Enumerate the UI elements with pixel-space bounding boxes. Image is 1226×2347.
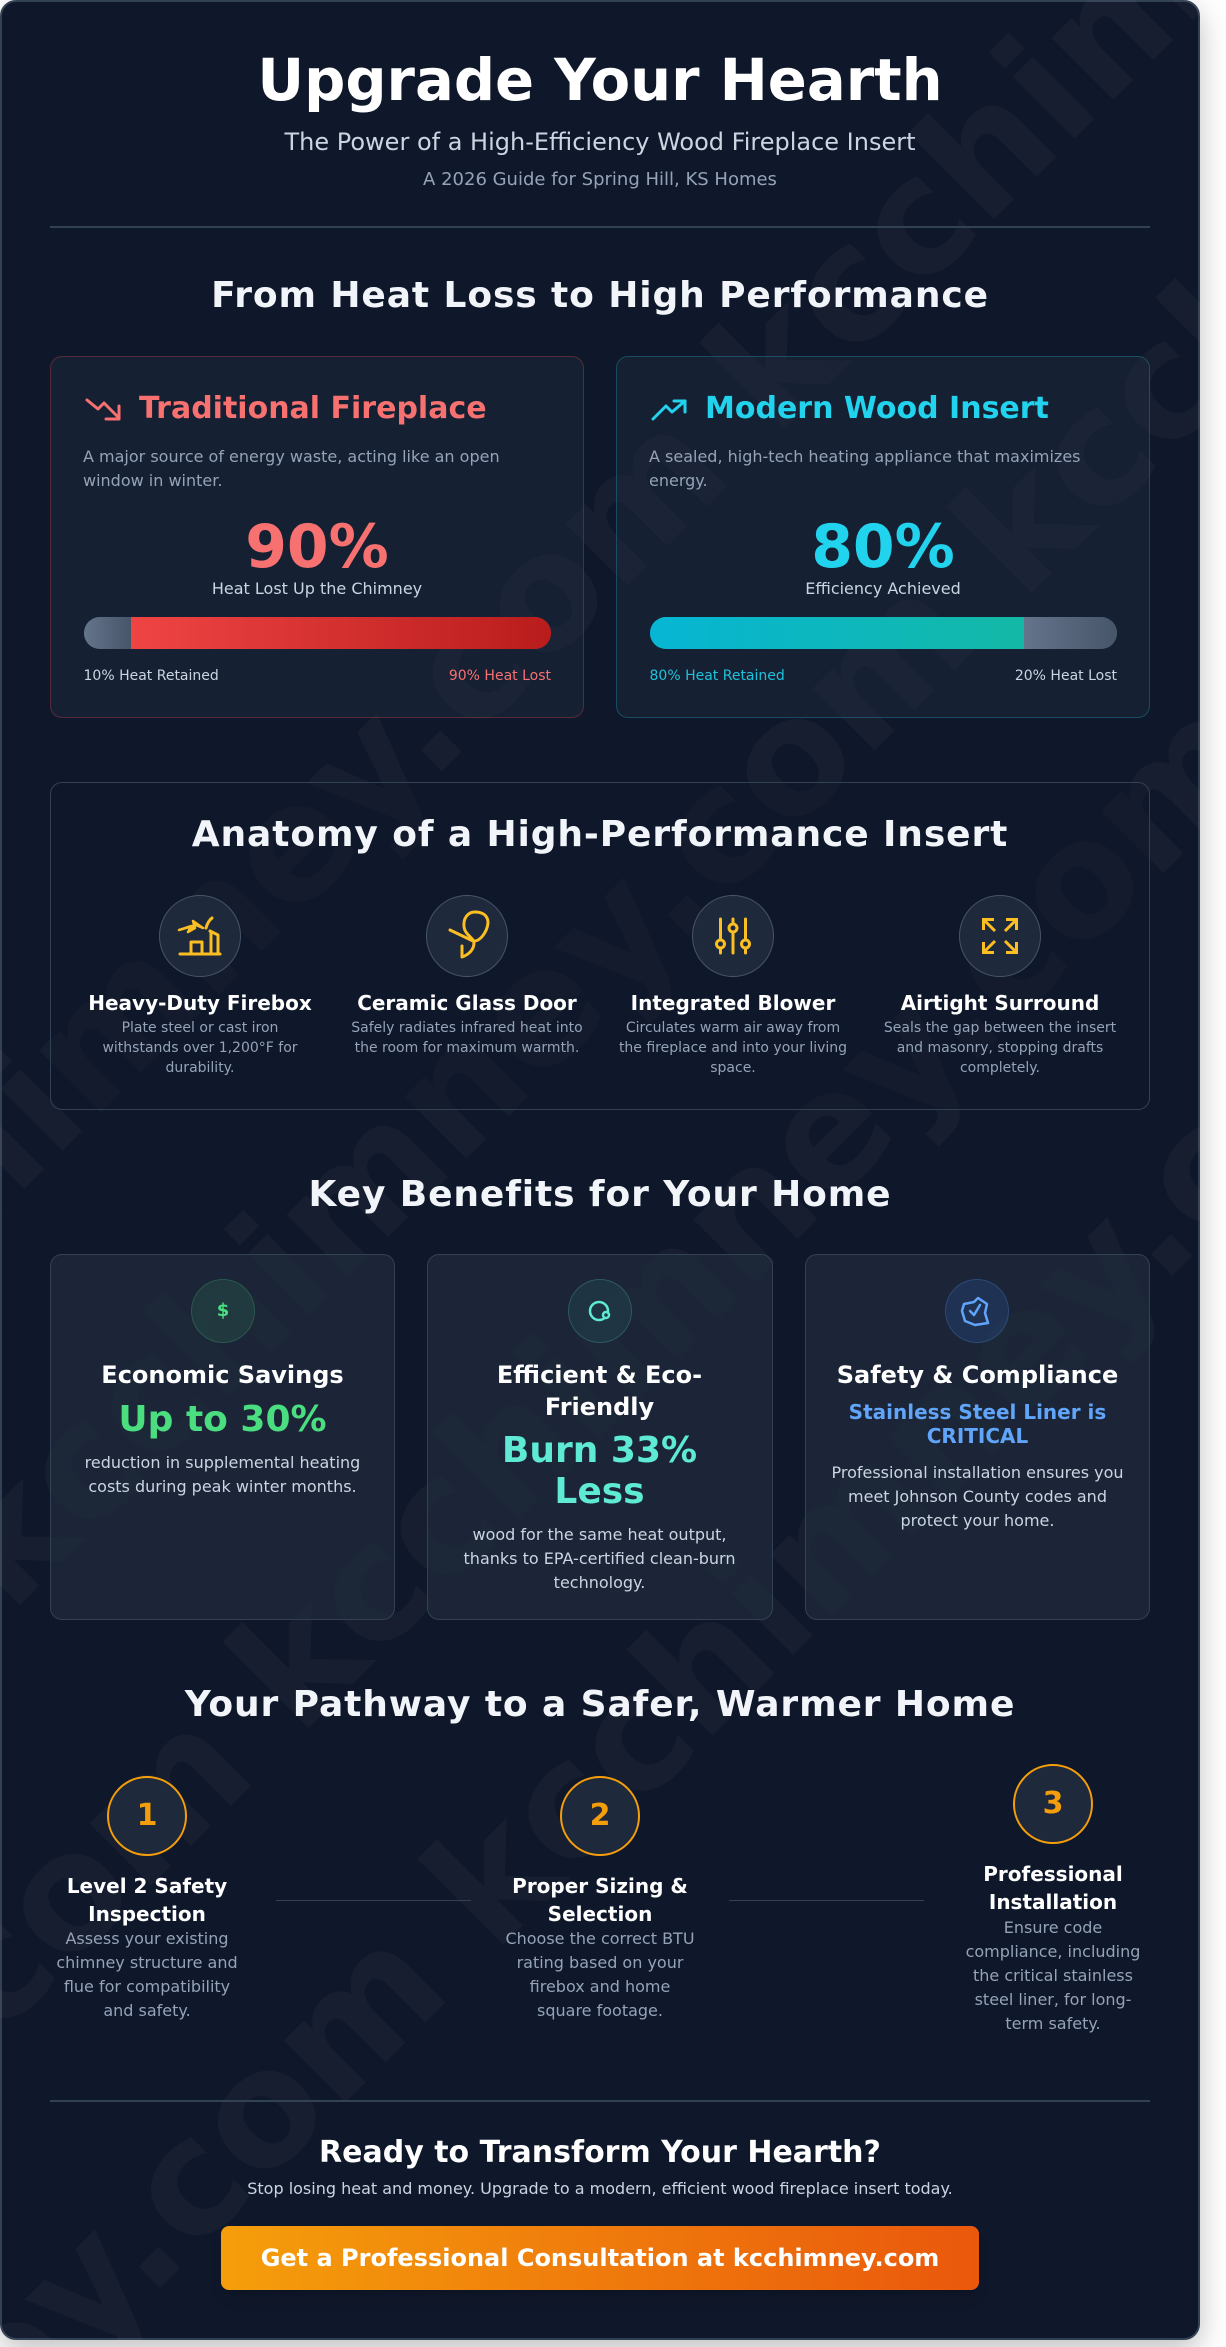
step 1 title: Inspection (88, 1902, 206, 1926)
card stat (849, 1400, 1106, 1448)
card: economic savings (50, 1254, 395, 1620)
card: eco-friendly (427, 1254, 773, 1620)
feature title: Airtight Surround (901, 991, 1099, 1015)
step 2 title: Proper Sizing & (512, 1874, 688, 1898)
card description: thanks to EPA-certified clean-burn (464, 1549, 735, 1568)
feature description: Safely radiates infrared heat into (351, 1020, 583, 1036)
stat: 80%: 80% (811, 512, 955, 582)
title: Upgrade Your Hearth (257, 47, 943, 114)
card stat: CRITICAL (927, 1424, 1028, 1448)
step 3 number: 3 (1043, 1786, 1063, 1821)
heading: pathway: Your Pathway to a Safer, Warmer Home (185, 1684, 1015, 1725)
stat: 90%: 90% (245, 512, 389, 582)
card description: technology. (554, 1573, 645, 1592)
panel: anatomy (50, 782, 1150, 1110)
card title: Efficient & Eco- (497, 1361, 702, 1389)
step 1 description: flue for compatibility (64, 1977, 230, 1996)
step 2 description: rating based on your (517, 1953, 683, 1972)
icon: airtight expand arrows (959, 895, 1041, 977)
icon: trending up (651, 399, 687, 421)
panel title: Traditional Fireplace (139, 391, 487, 426)
step 1 title: Level 2 Safety (67, 1874, 227, 1898)
card title: Safety & Compliance (837, 1361, 1118, 1389)
card description (831, 1463, 1124, 1530)
step 1 title (67, 1874, 227, 1926)
card description: costs during peak winter months. (88, 1477, 357, 1496)
call to action button: Get a Professional Consultation at kcchimney.com (261, 2244, 939, 2272)
feature description (102, 1020, 298, 1076)
step 2 description: Choose the correct BTU (505, 1929, 695, 1948)
step 1 number (107, 1776, 187, 1856)
card description: Professional installation ensures you (831, 1463, 1124, 1482)
heading: heat loss to performance: From Heat Loss to High Performance (211, 275, 989, 316)
step 2 description: firebox and home (530, 1977, 670, 1996)
feature description: space. (710, 1060, 756, 1076)
step 1 description: Assess your existing (65, 1929, 229, 1948)
card stat: Stainless Steel Liner is (849, 1400, 1106, 1424)
step 3 description: compliance, including (966, 1942, 1140, 1961)
bar label: retained: 80% Heat Retained (650, 668, 785, 684)
icon: glass door (426, 895, 508, 977)
card title: Friendly (545, 1393, 654, 1421)
bar label: lost: 90% Heat Lost (449, 668, 551, 684)
call to action button (221, 2226, 979, 2290)
icon: shield (945, 1279, 1009, 1343)
stat label: Heat Lost Up the Chimney (212, 579, 422, 598)
step 2 description (505, 1929, 695, 2020)
feature description: the fireplace and into your living (619, 1040, 847, 1056)
card stat: Less (554, 1471, 645, 1512)
step 3 description: steel liner, for long- (975, 1990, 1131, 2009)
card description: meet Johnson County codes and (848, 1487, 1107, 1506)
card stat: Burn 33% (502, 1430, 697, 1471)
icon: dollar (191, 1279, 255, 1343)
step 2 number (560, 1776, 640, 1856)
bar label: lost: 20% Heat Lost (1015, 668, 1117, 684)
bar label: retained: 10% Heat Retained (84, 668, 219, 684)
card description: protect your home. (901, 1511, 1054, 1530)
feature description: withstands over 1,200°F for (102, 1040, 298, 1056)
feature description: Plate steel or cast iron (122, 1020, 278, 1036)
feature title: Heavy-Duty Firebox (88, 991, 312, 1015)
heading: key benefits: Key Benefits for Your Home (308, 1174, 892, 1215)
step 2 title (512, 1874, 688, 1926)
feature description: completely. (960, 1060, 1040, 1076)
card stat (502, 1430, 697, 1512)
card description: wood for the same heat output, (472, 1525, 726, 1544)
card description (85, 1453, 360, 1496)
feature description: Seals the gap between the insert (884, 1020, 1116, 1036)
feature description: and masonry, stopping drafts (897, 1040, 1103, 1056)
feature description (619, 1020, 847, 1076)
panel: traditional fireplace (50, 356, 584, 718)
icon: leaf ring (568, 1279, 632, 1343)
icon: firebox (159, 895, 241, 977)
panel title: Modern Wood Insert (705, 391, 1049, 426)
card title (497, 1361, 702, 1421)
step 2 description: square footage. (537, 2001, 663, 2020)
feature description: durability. (166, 1060, 234, 1076)
step 3 title: Professional (983, 1862, 1123, 1886)
card title: Economic Savings (101, 1361, 344, 1389)
card stat: Up to 30% (118, 1399, 327, 1440)
feature title: Ceramic Glass Door (357, 991, 577, 1015)
icon: trending down (85, 398, 121, 420)
panel description (649, 447, 1080, 490)
step 1 description: chimney structure and (56, 1953, 238, 1972)
card: safety (805, 1254, 1150, 1620)
panel: modern wood insert (616, 356, 1150, 718)
step 2 title: Selection (548, 1902, 652, 1926)
bar: heat retained vs lost (650, 617, 1117, 649)
stat label: Efficiency Achieved (805, 579, 961, 598)
step 1 description: and safety. (103, 2001, 191, 2020)
subtitle: The Power of a High-Efficiency Wood Fireplace Insert (284, 128, 916, 156)
step 3 description: the critical stainless (973, 1966, 1133, 1985)
step 1 number: 1 (137, 1798, 157, 1833)
step 3 description: Ensure code (1004, 1918, 1102, 1937)
feature description: the room for maximum warmth. (355, 1040, 579, 1056)
panel description: window in winter. (83, 471, 222, 490)
card description: reduction in supplemental heating (85, 1453, 360, 1472)
feature description: Circulates warm air away from (626, 1020, 840, 1036)
step 3 description: term safety. (1005, 2014, 1101, 2033)
step 2 number: 2 (590, 1798, 610, 1833)
step 3 number (1013, 1764, 1093, 1844)
card description (464, 1525, 735, 1592)
step 1 description (56, 1929, 238, 2020)
panel description (83, 447, 500, 490)
heading: anatomy: Anatomy of a High-Performance Insert (192, 814, 1008, 855)
feature description (884, 1020, 1116, 1076)
feature description (351, 1020, 583, 1056)
step 3 title: Installation (989, 1890, 1117, 1914)
panel description: A major source of energy waste, acting like an open (83, 447, 500, 466)
location line: A 2026 Guide for Spring Hill, KS Homes (423, 169, 777, 190)
feature title: Integrated Blower (631, 991, 835, 1015)
icon: blower sliders (692, 895, 774, 977)
step 3 description (966, 1918, 1140, 2033)
icon: dollar: $ (217, 1300, 229, 1321)
step 3 title (983, 1862, 1123, 1914)
bar: heat retained vs lost (84, 617, 551, 649)
panel description: energy. (649, 471, 708, 490)
panel description: A sealed, high-tech heating appliance that maximizes (649, 447, 1080, 466)
call to action text: Stop losing heat and money. Upgrade to a modern, efficient wood fireplace insert today. (247, 2179, 953, 2198)
call to action heading: Ready to Transform Your Hearth? (319, 2135, 881, 2170)
